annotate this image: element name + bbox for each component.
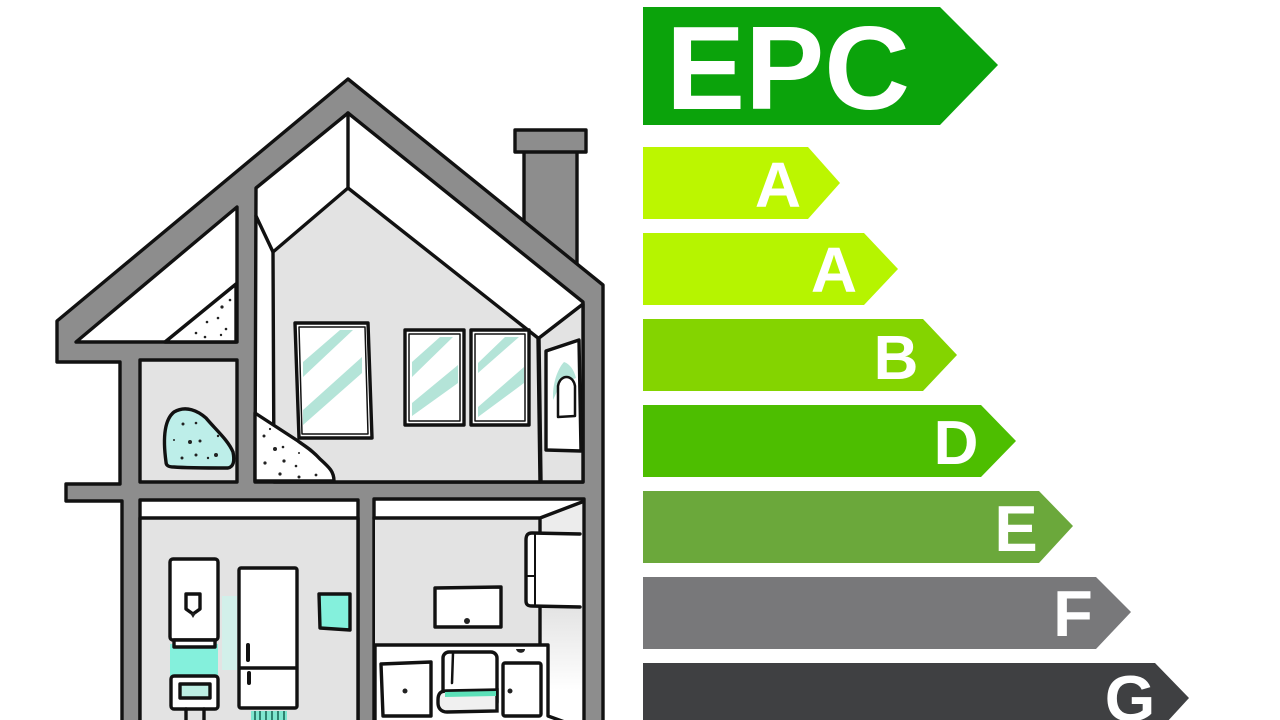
insulation blob bbox=[165, 409, 234, 468]
chimney bbox=[515, 130, 586, 275]
hood bbox=[435, 587, 501, 627]
band A second bbox=[643, 233, 898, 306]
cabinet left bbox=[381, 662, 431, 716]
teal wall glow bbox=[222, 596, 237, 670]
band G bbox=[643, 662, 1189, 720]
kitchen counter bbox=[375, 645, 573, 720]
band B bbox=[643, 319, 957, 393]
band D bbox=[643, 405, 1016, 478]
band A bbox=[643, 147, 840, 221]
downstairs left room bbox=[140, 500, 358, 720]
back wall bbox=[273, 188, 540, 482]
EPC heading arrow: EPC bbox=[666, 2, 910, 135]
house illustration bbox=[57, 79, 603, 720]
cabinet right bbox=[503, 663, 541, 716]
small upstairs room bbox=[140, 360, 237, 482]
right side wall bbox=[539, 304, 583, 482]
window 3 bbox=[471, 330, 529, 425]
house wall and roof silhouette bbox=[57, 79, 603, 720]
EPC rating scale bbox=[643, 2, 1189, 720]
band E bbox=[643, 491, 1073, 565]
side window bbox=[546, 340, 581, 451]
control box bbox=[171, 676, 218, 720]
band D: D bbox=[934, 409, 978, 478]
band F: F bbox=[1053, 577, 1093, 650]
cooker bbox=[438, 652, 497, 712]
band E: E bbox=[994, 492, 1038, 565]
window 2 bbox=[405, 330, 464, 425]
attic left room bbox=[76, 207, 237, 342]
main upstairs room bbox=[255, 113, 583, 482]
fridge bbox=[239, 568, 297, 720]
attic insulation bbox=[165, 284, 236, 342]
downstairs kitchen bbox=[374, 499, 584, 720]
EPC heading arrow bbox=[643, 2, 998, 135]
band F bbox=[643, 577, 1131, 650]
wall cabinet bbox=[526, 533, 580, 607]
ceiling edges bbox=[256, 113, 348, 252]
teal wall panel bbox=[319, 594, 350, 630]
band A second: A bbox=[811, 234, 857, 306]
band A: A bbox=[755, 149, 801, 221]
band B: B bbox=[874, 324, 918, 393]
window 1 bbox=[295, 323, 372, 438]
boiler bbox=[170, 559, 218, 676]
rubble insulation bbox=[255, 413, 334, 481]
